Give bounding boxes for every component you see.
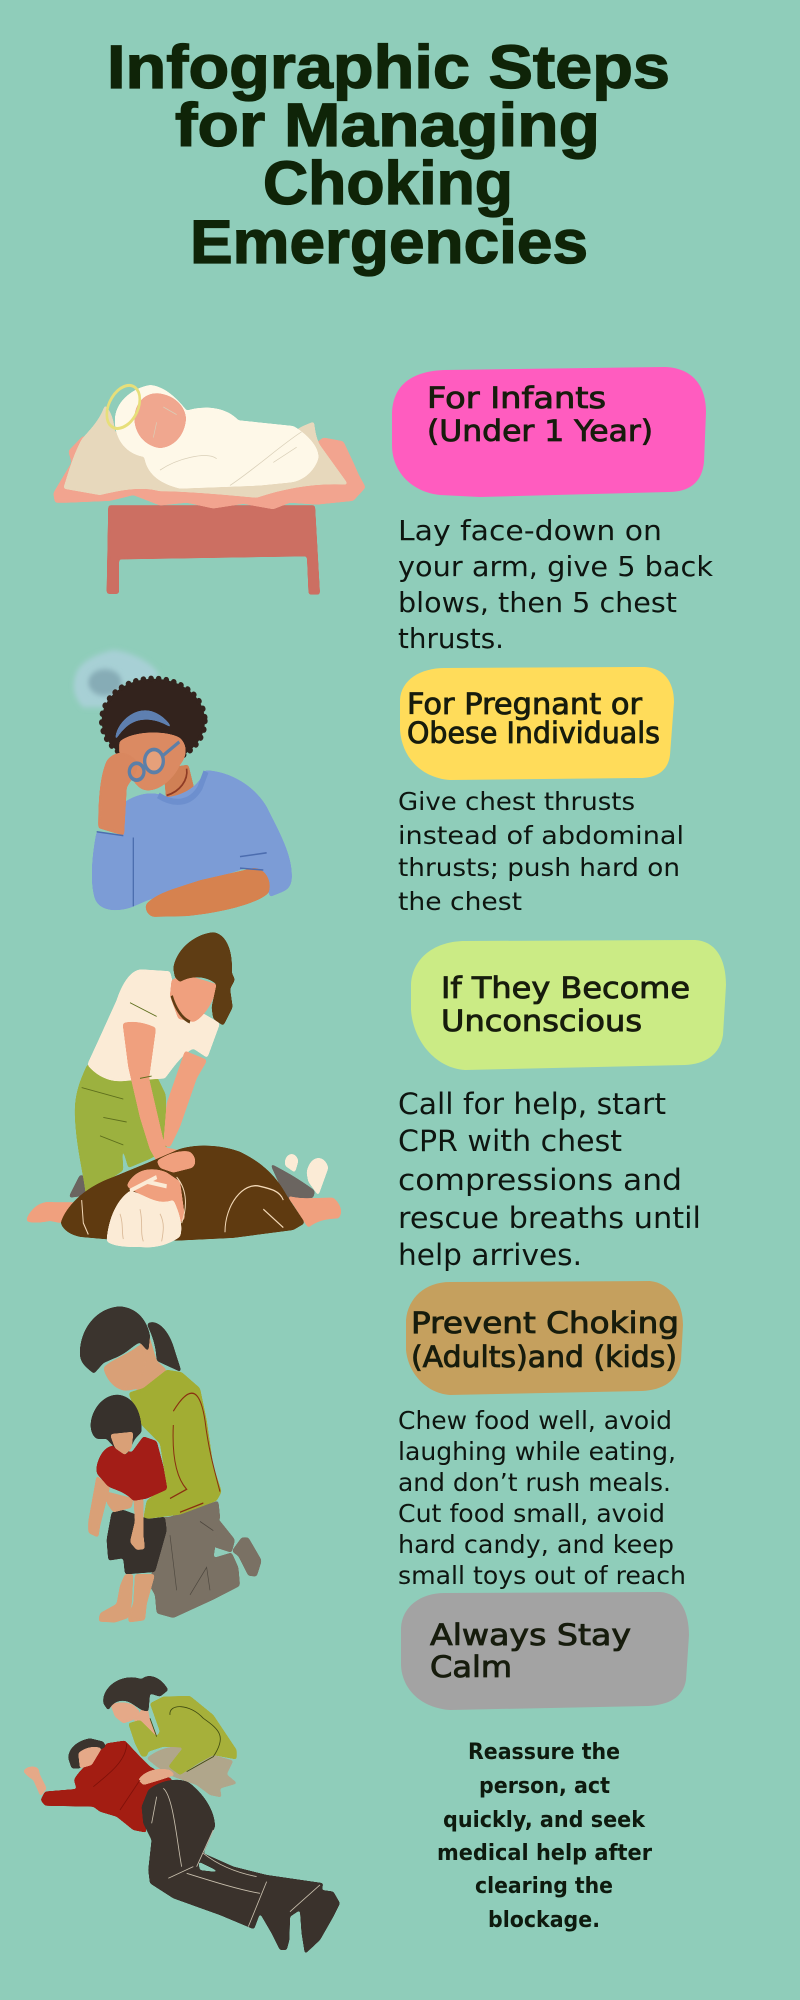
text: unconscious instructions: Call for help, start [398, 1087, 666, 1121]
text: unconscious instructions: CPR with chest [398, 1124, 622, 1158]
text: pregnant instructions: thrusts; push hard on [398, 853, 680, 882]
text: prevention tips [398, 1406, 686, 1590]
heading: for infants [427, 381, 653, 448]
text: prevention tips: Cut food small, avoid [398, 1499, 665, 1528]
text: infant instructions: blows, then 5 chest [398, 586, 677, 619]
text: infant instructions: thrusts. [398, 622, 504, 655]
text: prevention tips: Chew food well, avoid [398, 1406, 672, 1435]
illustration: woman helping a choking child [80, 1307, 262, 1622]
heading: always stay calm: Calm [430, 1650, 512, 1684]
illustration: recovery position [23, 1676, 340, 1954]
text: reassurance instructions: blockage. [488, 1908, 600, 1933]
text: pregnant instructions [398, 787, 684, 916]
text: pregnant instructions: instead of abdominal [398, 821, 684, 850]
text: pregnant instructions: Give chest thrusts [398, 787, 635, 816]
text: reassurance instructions: medical help after [437, 1841, 652, 1866]
green heading shape [411, 940, 726, 1070]
heading: prevent choking: Prevent Choking [411, 1306, 679, 1340]
title: for Managing [175, 91, 600, 159]
brown heading shape [406, 1281, 683, 1395]
heading: unconscious: Unconscious [441, 1004, 642, 1038]
illustration: swaddled infant on a table [53, 378, 366, 594]
heading: always stay calm: Always Stay [430, 1618, 631, 1652]
text: prevention tips: hard candy, and keep [398, 1530, 674, 1559]
title: Infographic Steps [107, 33, 670, 101]
text: unconscious instructions: help arrives. [398, 1238, 582, 1272]
heading: for infants: (Under 1 Year) [427, 414, 653, 448]
title [107, 33, 670, 276]
text: reassurance instructions: clearing the [475, 1874, 613, 1899]
text: reassurance instructions [437, 1740, 652, 1933]
heading: pregnant or obese: Obese Individuals [407, 716, 660, 750]
text: unconscious instructions: compressions and [398, 1163, 682, 1197]
heading: for infants: For Infants [427, 381, 606, 415]
illustration: person with headache in blue sweater [74, 650, 292, 917]
text: reassurance instructions: person, act [479, 1774, 610, 1799]
title: Emergencies [190, 208, 588, 276]
heading: prevent choking [411, 1306, 679, 1374]
text: pregnant instructions: the chest [398, 887, 522, 916]
heading: unconscious: If They Become [441, 971, 690, 1005]
text: prevention tips: small toys out of reach [398, 1561, 686, 1590]
heading: always stay calm [430, 1618, 631, 1684]
yellow heading shape [400, 667, 674, 780]
text: infant instructions: Lay face-down on [398, 514, 662, 547]
text: reassurance instructions: quickly, and seek [443, 1808, 646, 1833]
panel: always stay calm [401, 1592, 689, 1933]
text: infant instructions [398, 514, 714, 655]
panel: unconscious [398, 940, 726, 1272]
panel: for infants [392, 367, 714, 655]
pink heading shape [392, 367, 706, 497]
title: Choking [263, 149, 513, 217]
grey heading shape [401, 1592, 689, 1710]
illustration: rescuer performing CPR [26, 932, 341, 1247]
panel: prevent choking [398, 1281, 686, 1590]
heading: prevent choking: (Adults)and (kids) [411, 1340, 677, 1374]
heading: pregnant or obese [407, 687, 660, 750]
panel: pregnant or obese [398, 667, 684, 916]
heading: unconscious [441, 971, 690, 1038]
text: prevention tips: laughing while eating, [398, 1437, 676, 1466]
heading: pregnant or obese: For Pregnant or [407, 687, 642, 721]
text: unconscious instructions: rescue breaths until [398, 1201, 701, 1235]
text: prevention tips: and don’t rush meals. [398, 1468, 671, 1497]
text: infant instructions: your arm, give 5 back [398, 550, 714, 583]
text: unconscious instructions [398, 1087, 701, 1272]
text: reassurance instructions: Reassure the [468, 1740, 620, 1765]
